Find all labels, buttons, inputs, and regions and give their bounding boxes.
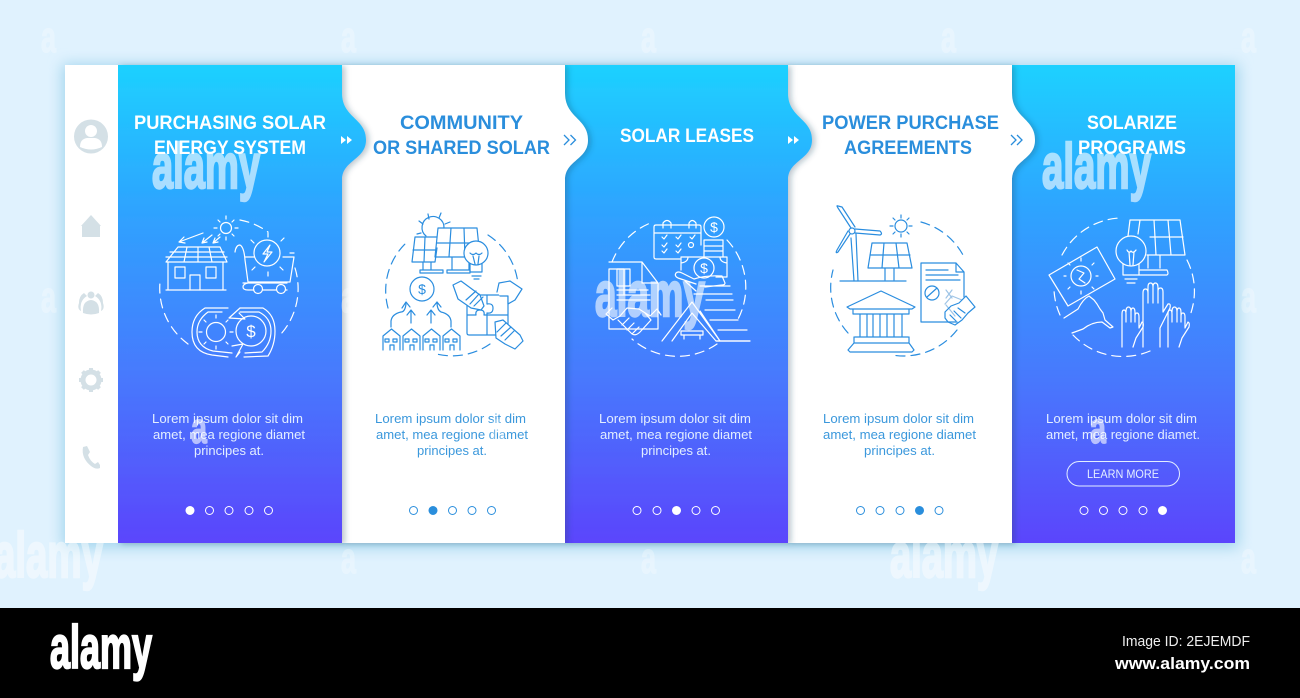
- watermarks: a: [641, 13, 656, 62]
- watermarks: alamy: [595, 260, 705, 330]
- body text: amet, mea regione diamet: [600, 428, 753, 442]
- watermarks: a: [191, 404, 207, 453]
- body text: principes at.: [417, 444, 487, 458]
- icon: solarize programs: [1049, 218, 1194, 356]
- icon: solar leases: $: [710, 219, 718, 235]
- card shadow: [62, 64, 1239, 548]
- heading: purchasing solar energy system: ENERGY SYSTEM: [154, 138, 306, 159]
- chevrons: [341, 136, 352, 144]
- pagination dots: [186, 506, 272, 514]
- body text: [1046, 412, 1200, 442]
- pagination dots: [633, 506, 720, 514]
- heading: power purchase agreements: POWER PURCHASE: [822, 113, 999, 134]
- icon: phone: [83, 446, 100, 469]
- chevrons: [1011, 135, 1022, 145]
- watermarks: a: [341, 273, 356, 322]
- heading: power purchase agreements: [822, 113, 999, 159]
- heading: power purchase agreements: AGREEMENTS: [844, 138, 972, 159]
- body text: [599, 412, 753, 458]
- icon: home: [81, 215, 101, 237]
- body text: principes at.: [641, 444, 711, 458]
- panel: community or shared solar: [342, 65, 588, 543]
- panel: power purchase agreements: [788, 65, 1035, 543]
- body text: Lorem ipsum dolor sit dim: [599, 412, 751, 426]
- button: learn more: LEARN MORE: [1087, 467, 1159, 481]
- watermarks: a: [1241, 534, 1256, 583]
- watermarks: alamy: [152, 132, 260, 202]
- heading: purchasing solar energy system: PURCHASING SOLAR: [134, 113, 326, 134]
- body text: Lorem ipsum dolor sit dim: [152, 412, 303, 426]
- icon: community or shared solar: $: [418, 281, 426, 297]
- panel: solarize programs: [1012, 65, 1235, 543]
- watermarks: a: [341, 534, 356, 583]
- body text: [375, 412, 529, 458]
- body text: Lorem ipsum dolor sit dim: [823, 412, 974, 426]
- body text: amet, mea regione diamet: [823, 428, 977, 442]
- icon: solar leases: [606, 217, 750, 356]
- icon: purchasing solar energy system: $: [246, 322, 256, 341]
- panel: sidebar: [65, 65, 118, 543]
- heading: solarize programs: [1078, 113, 1186, 159]
- chevrons: [564, 135, 576, 145]
- icon: user: [74, 120, 108, 154]
- watermarks: a: [1241, 273, 1256, 322]
- body text: Lorem ipsum dolor sit dim: [1046, 412, 1197, 426]
- panel: purchasing solar energy system: [118, 65, 366, 543]
- watermarks: a: [641, 534, 656, 583]
- pagination dots: [856, 506, 943, 514]
- icon: settings gear: [79, 368, 103, 392]
- heading: solarize programs: PROGRAMS: [1078, 138, 1186, 159]
- heading: community or shared solar: COMMUNITY: [400, 113, 523, 134]
- footer logo: alamy: [50, 614, 152, 681]
- button: learn more: [1067, 462, 1180, 486]
- pagination dots: [1080, 506, 1166, 514]
- watermarks: a: [490, 404, 506, 453]
- chevrons: [788, 136, 799, 144]
- body text: principes at.: [194, 444, 264, 458]
- body text: principes at.: [864, 444, 935, 458]
- icon: community or shared solar: [383, 213, 523, 356]
- website: www.alamy.com: [1114, 655, 1250, 673]
- body text: amet, mea regione diamet.: [1046, 428, 1200, 442]
- icon: power purchase agreements: [831, 206, 975, 356]
- icon: group: [78, 292, 104, 314]
- watermarks: a: [41, 273, 56, 322]
- footer bar: [0, 608, 1300, 698]
- heading: purchasing solar energy system: [134, 113, 326, 159]
- body text: [823, 412, 977, 458]
- image id: Image ID: 2EJEMDF: [1122, 633, 1250, 650]
- watermarks: a: [341, 13, 356, 62]
- icon: solar leases: $: [700, 260, 708, 276]
- watermarks: a: [1241, 13, 1256, 62]
- watermarks: a: [41, 13, 56, 62]
- panel: solar leases: [565, 65, 812, 543]
- watermarks: a: [1090, 404, 1106, 453]
- body text: [152, 412, 306, 458]
- heading: solar leases: SOLAR LEASES: [620, 126, 754, 147]
- body text: amet, mea regione diamet: [376, 428, 529, 442]
- pagination dots: [410, 506, 496, 514]
- watermarks: alamy: [1042, 132, 1151, 202]
- heading: community or shared solar: OR SHARED SOLAR: [373, 138, 550, 159]
- body text: amet, mea regione diamet: [153, 428, 306, 442]
- body text: Lorem ipsum dolor sit dim: [375, 412, 526, 426]
- heading: community or shared solar: [373, 113, 550, 159]
- icon: purchasing solar energy system: [160, 216, 298, 357]
- watermarks: a: [941, 13, 956, 62]
- heading: solarize programs: SOLARIZE: [1087, 113, 1177, 134]
- watermarks: alamy: [890, 521, 998, 591]
